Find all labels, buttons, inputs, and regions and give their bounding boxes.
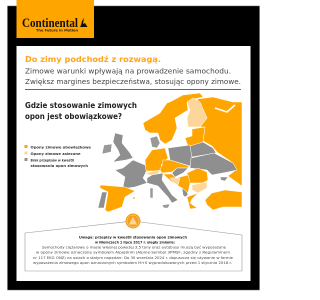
Denmark <box>150 136 160 148</box>
note body <box>33 246 233 265</box>
note body: nr 117 EKG ONZ) na osiach o stałym napędzie. Do 30 września 2024 r. dopuszcza się używanie w formie <box>33 256 233 260</box>
Italy <box>147 173 178 203</box>
White Sea notch <box>215 105 235 112</box>
Germany <box>145 148 168 171</box>
heading: opon jest obowiązkowe? <box>25 112 122 121</box>
title: Do zimy podchodź z rozwagą. <box>25 55 161 64</box>
black frame <box>8 6 260 290</box>
note body: wyposażenia zimowego opon oznaczonych symbolem M+S wyprodukowanych przed 1 stycznia 2018 r. <box>33 261 232 265</box>
note panel <box>25 221 242 271</box>
France <box>115 160 147 188</box>
legend: Opony zimowe obowiązkowe <box>30 146 92 150</box>
Switzerland <box>145 170 160 176</box>
Balkans <box>163 174 190 193</box>
Russia <box>197 97 242 186</box>
Sicily <box>162 204 170 208</box>
note heading: w Niemczech 1 lipca 2017 r. uległy zmianie: <box>95 240 175 244</box>
Romania <box>187 168 208 183</box>
legend: Opony zimowe zalecane <box>30 152 81 156</box>
note heading: Uwaga: przepisy w kwestii stosowania opon zimowych <box>79 236 188 240</box>
intro text: Zimowe warunki wpływają na prowadzenie samochodu. <box>25 68 231 76</box>
icon: warning badge <box>126 214 140 228</box>
UK <box>113 133 133 162</box>
Balearic <box>133 197 135 199</box>
heading <box>25 101 137 121</box>
legend: Brak przepisów w kwestii <box>30 158 74 162</box>
Norway and Sweden <box>143 93 203 144</box>
Albania <box>182 188 188 197</box>
note body: Samochody ciężarowe o masie własnej powyżej 3,5 tony oraz autobusy muszą być wyposażone <box>42 246 226 250</box>
note heading <box>79 236 188 244</box>
legend: stosowania opon zimowych <box>30 164 89 168</box>
Bosnia <box>170 178 180 185</box>
intro text: Zwiększ margines bezpieczeństwa, stosując opony zimowe. <box>25 78 241 86</box>
Czechia, Austria, Slovakia <box>160 160 189 173</box>
logo block: The Future in Motion <box>36 28 79 32</box>
Finland <box>187 98 207 127</box>
Spain <box>100 185 135 212</box>
Portugal <box>98 192 107 208</box>
Baltics <box>185 127 205 146</box>
heading: Gdzie stosowanie zimowych <box>25 101 137 110</box>
Ireland <box>102 144 112 154</box>
Belarus <box>190 142 216 157</box>
Poland <box>168 145 192 166</box>
note body: w opony zimowe oznaczone symbolem Alpejskim (Alpine-Symbol 3PMSF, zgodny z Regulaminem <box>36 250 230 254</box>
map of Europe <box>98 93 242 212</box>
legend <box>24 145 92 168</box>
Hungary <box>172 168 188 177</box>
logo block <box>16 0 94 38</box>
logo block: Continental <box>22 16 78 30</box>
Ukraine <box>190 153 237 175</box>
Turkey <box>205 190 242 210</box>
Sardinia <box>150 188 153 198</box>
white content panel <box>16 46 250 281</box>
Bulgaria <box>192 182 207 193</box>
intro text <box>25 68 241 86</box>
Crimea <box>220 177 228 181</box>
Greece <box>187 193 198 209</box>
